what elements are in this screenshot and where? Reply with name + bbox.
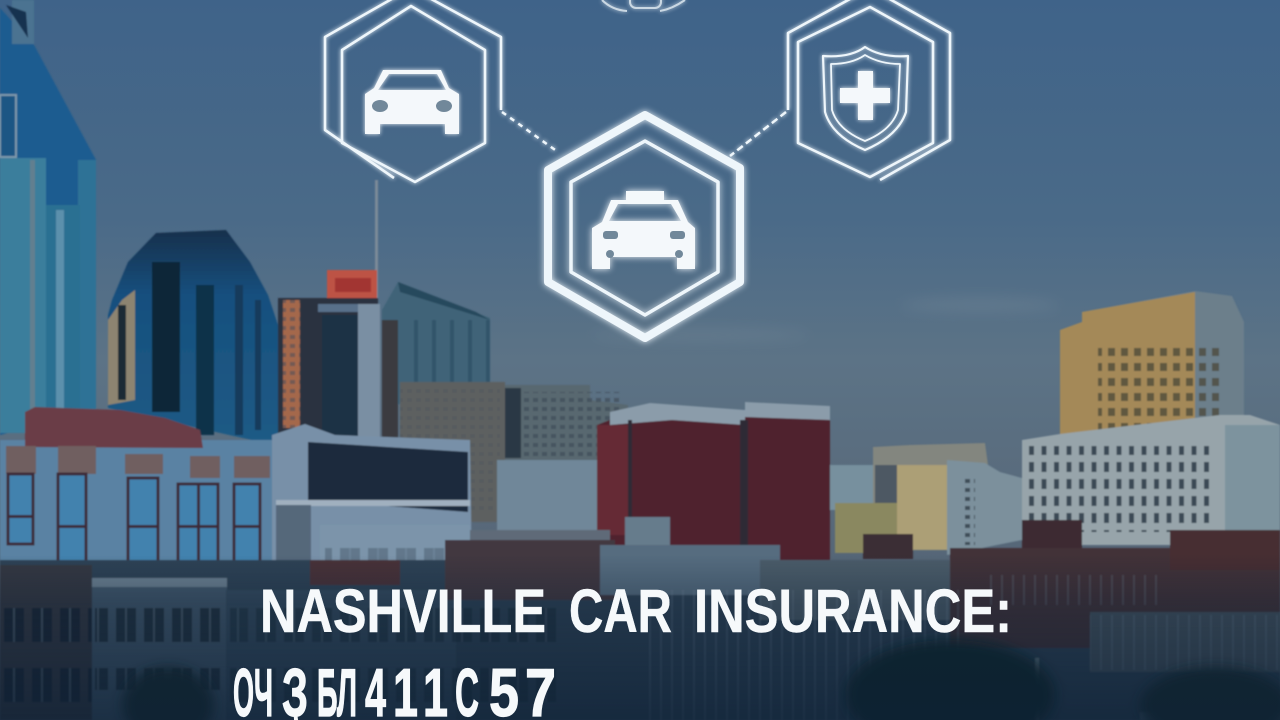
bottom dark shade [0,555,1280,720]
building: white tiered block [1022,415,1280,545]
title: NASHVILLE [260,577,546,645]
connector: top icon to centre hexagon [644,24,646,110]
hexagon: right shield [788,0,950,180]
building: dark office tower [278,298,380,440]
building: maroon block [597,402,830,570]
icon: taxi [592,191,695,269]
icon: car [365,70,459,134]
building: mast and red sign [327,180,378,305]
building: white block centre [497,460,597,535]
buildings: mid-right yellow and grey cluster [830,443,1022,555]
building: orange tower [1060,291,1244,435]
garbled subtitle [233,655,556,720]
foreground dark trees [122,640,1280,720]
low-rise white facade left [0,407,280,585]
icon: shield with cross [823,47,908,150]
connector: left hexagon to centre hexagon [502,112,558,152]
network diagram [325,0,950,338]
title: INSURANCE: [694,577,1012,645]
building: teal slanted tower [382,282,505,522]
building: round blue tower [108,230,283,447]
building: left glass tower [0,0,96,435]
foreground brick and rooftops [0,517,1280,720]
hexagon: left car [325,0,501,182]
icon: cropped top hexagon emblem [602,0,685,11]
hexagon: centre taxi [548,115,740,338]
faint clouds [590,298,1060,341]
title: CAR [569,577,672,645]
building: grey office block [505,385,628,470]
title [260,577,1012,645]
low-rise white block with dark band [272,424,472,575]
connector: right hexagon to centre hexagon [730,112,786,156]
